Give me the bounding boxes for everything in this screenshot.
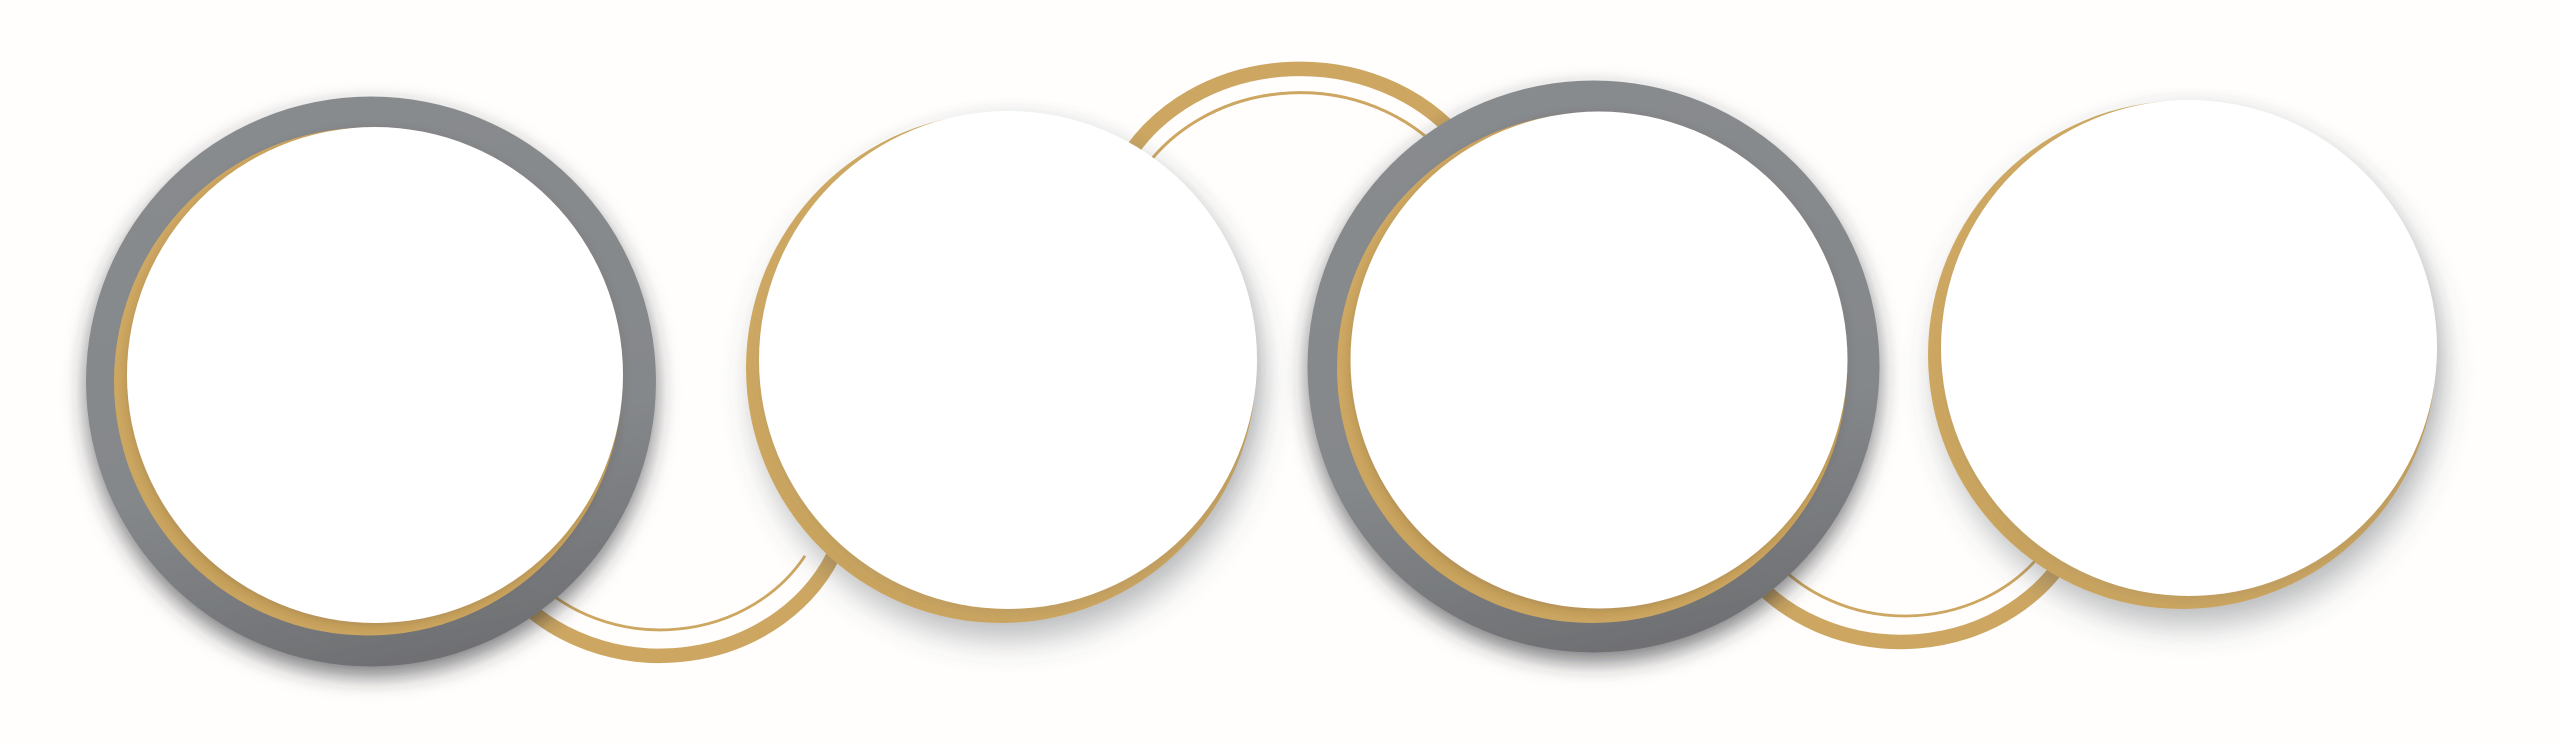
panel: circle 3 with gray ring [1308, 80, 1880, 652]
panel: circle 1 with gray ring [86, 96, 656, 666]
panel: circle 4 with gold ring [1928, 100, 2437, 609]
panel: circle 2 with gold ring [746, 111, 1257, 623]
connector arc: circle 3 to circle 4 [1741, 538, 2076, 642]
connector arc: circle 1 to circle 2 [510, 546, 838, 656]
connector arc: circle 2 to circle 3 [1122, 69, 1470, 175]
